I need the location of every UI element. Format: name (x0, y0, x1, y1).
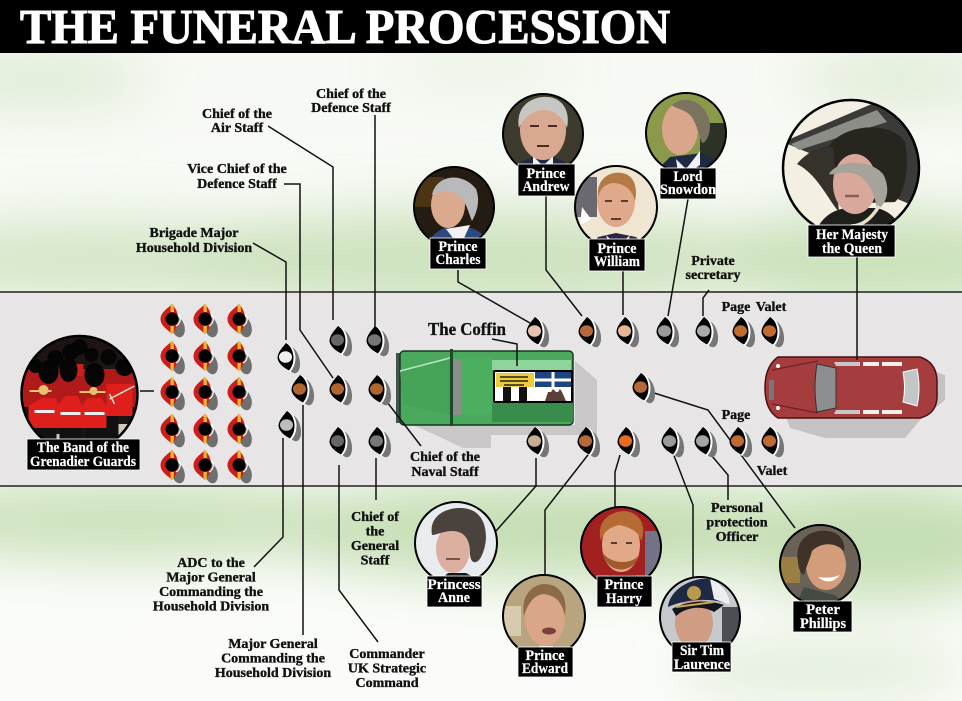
Anne label (427, 576, 482, 607)
label: Brigade Major Household Division: Brigade Major (149, 226, 239, 241)
officers figures (278, 326, 394, 459)
band label: Grenadier Guards (30, 454, 136, 470)
Andrew label (518, 164, 575, 196)
label: Page bottom: Page (722, 408, 750, 423)
title: THE FUNERAL PROCESSION (20, 0, 670, 54)
label: Personal protection Officer: Personal (711, 501, 763, 516)
label: ADC: Household Division (153, 600, 269, 614)
label: Personal protection Officer: Officer (716, 530, 758, 545)
band label (27, 439, 140, 470)
Charles label: Prince (438, 239, 478, 255)
Harry label: Prince (604, 577, 644, 593)
portrait: Prince William (575, 166, 657, 271)
Snowdon label: Lord (674, 169, 702, 185)
Snowdon label: Snowdon (660, 182, 716, 198)
Anne label: Anne (438, 590, 471, 606)
Snowdon label (660, 168, 716, 199)
label: ADC: Commanding the (159, 585, 263, 600)
Peter label: Peter (806, 602, 841, 618)
portrait: Princess Anne (415, 502, 497, 607)
Peter label: Phillips (800, 616, 846, 632)
Charles label: Charles (436, 252, 481, 268)
label: Vice Chief of the Defence Staff: Vice Chief of the (187, 162, 287, 177)
Peter label (793, 601, 852, 632)
title bar (0, 0, 962, 54)
label: ADC: ADC to the (177, 556, 245, 571)
Andrew label: Prince (526, 166, 566, 182)
label: Valet top: Valet (756, 300, 787, 315)
label: Chief of the Naval Staff: Chief of the (410, 450, 480, 465)
bottom row figures (526, 427, 787, 459)
band label: The Band of the (37, 440, 130, 456)
label: Brigade Major Household Division: Household Division (136, 241, 252, 256)
label: Chief of the Air Staff: Chief of the (202, 107, 272, 122)
label: Chief of the General Staff: the (366, 524, 384, 540)
state hearse (765, 357, 945, 438)
label: Chief of the Defence Staff: Defence Staff (311, 101, 391, 116)
Charles label (430, 238, 486, 269)
label: Chief of the Air Staff: Air Staff (211, 121, 263, 136)
William label: Prince (598, 241, 637, 257)
label: Commander UK Strategic Command: Commander (349, 647, 425, 662)
label: ADC: Major General (166, 570, 256, 586)
Harry label: Harry (606, 591, 643, 607)
portrait: Peter Phillips (780, 525, 860, 632)
Queen label (808, 225, 895, 257)
Edward label (518, 647, 573, 677)
top row figures (526, 317, 787, 405)
guardsmen block (160, 304, 254, 485)
road (0, 292, 962, 486)
Anne label: Princess (428, 577, 481, 593)
label: Chief of the Defence Staff: Chief of the (316, 87, 386, 102)
connector lines (140, 115, 857, 642)
label: Vice Chief of the Defence Staff: Defence Staff (197, 177, 277, 192)
Edward label: Prince (526, 648, 565, 664)
portrait: Prince Edward (503, 575, 585, 677)
coffin flag (493, 370, 573, 403)
portrait: Lord Snowdon (646, 93, 726, 199)
land rover with coffin (396, 349, 597, 448)
label: Valet bottom: Valet (757, 464, 788, 479)
Queen label: the Queen (822, 241, 882, 257)
label: Chief of the General Staff: Staff (361, 554, 390, 568)
label: Private secretary: secretary (686, 268, 740, 283)
label: Major General: Commanding the (221, 652, 325, 666)
label: Private secretary: Private (691, 254, 735, 269)
Queen label: Her Majesty (816, 227, 889, 243)
Harry label (597, 576, 652, 607)
portrait: Her Majesty the Queen (783, 100, 919, 257)
portrait: Sir Tim Laurence (660, 577, 740, 673)
Andrew label: Andrew (522, 179, 570, 195)
portrait: Prince Andrew (503, 94, 583, 196)
label: Commander UK Strategic Command: Command (355, 676, 419, 691)
Tim label: Sir Tim (680, 643, 724, 659)
William label (589, 239, 645, 271)
label: Page top: Page (722, 300, 750, 315)
Tim label: Laurence (674, 657, 731, 673)
portrait: Prince Harry (581, 507, 661, 607)
label: Major General: Household Division (215, 666, 331, 681)
Edward label: Edward (522, 661, 568, 677)
William label: William (594, 254, 640, 270)
portrait: Prince Charles (414, 167, 494, 269)
The Coffin label: The Coffin (428, 319, 506, 339)
Tim label (672, 642, 731, 673)
label: Major General: Major General (228, 637, 318, 652)
label: Chief of the General Staff: General (351, 539, 399, 554)
label: Chief of the Naval Staff: Naval Staff (411, 465, 479, 480)
portrait: band (22, 336, 140, 470)
label: Commander UK Strategic Command: UK Strategic (348, 662, 426, 676)
label: Chief of the General Staff: Chief of (351, 510, 399, 525)
label: Personal protection Officer: protection (706, 516, 768, 530)
